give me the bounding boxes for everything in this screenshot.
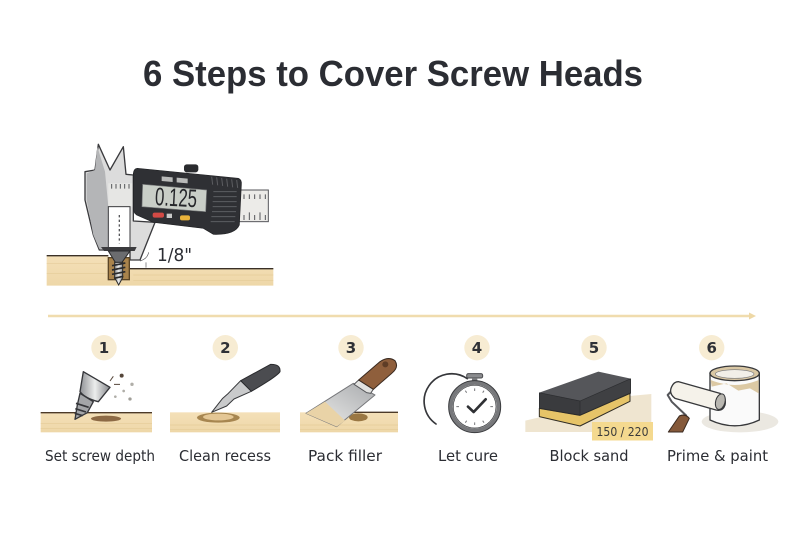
step 5 label: Block sand bbox=[550, 447, 628, 465]
angle mark bbox=[140, 252, 149, 268]
icon: stopwatch with check bbox=[424, 374, 501, 433]
step 3 number: 3 bbox=[346, 339, 356, 357]
depth label: 1/8" bbox=[157, 245, 192, 266]
step 1 label: Set screw depth bbox=[45, 447, 155, 465]
hero illustration: caliper measuring screw depth bbox=[47, 144, 273, 286]
grit label: 150 / 220 bbox=[596, 425, 648, 439]
step 5 bbox=[525, 335, 653, 465]
icon: tool cleaning recess bbox=[170, 364, 280, 432]
step 5 number: 5 bbox=[589, 339, 599, 357]
icon: paint can and roller bbox=[668, 366, 778, 432]
screw in recess bbox=[101, 247, 137, 285]
caliper beam bbox=[108, 183, 268, 222]
step 1 number: 1 bbox=[99, 339, 109, 357]
digital display body: 0.125 bbox=[154, 183, 198, 213]
step 2 bbox=[170, 335, 280, 465]
step 4 bbox=[424, 335, 501, 465]
wood board bbox=[47, 256, 273, 286]
title: 6 Steps to Cover Screw Heads bbox=[143, 53, 643, 94]
digital display body bbox=[133, 164, 241, 234]
icon: putty knife with filler bbox=[300, 359, 398, 432]
icon: sanding block bbox=[525, 372, 651, 432]
step 2 label: Clean recess bbox=[179, 447, 271, 465]
step 6 number: 6 bbox=[706, 339, 717, 357]
timeline arrow bbox=[48, 312, 756, 320]
step 3 bbox=[300, 335, 398, 465]
step 2 number: 2 bbox=[220, 339, 231, 357]
caliper jaws bbox=[85, 144, 155, 260]
step 4 label: Let cure bbox=[438, 447, 498, 465]
step 6 bbox=[667, 335, 778, 465]
step 4 number: 4 bbox=[472, 339, 482, 357]
step 6 label: Prime & paint bbox=[667, 447, 768, 465]
icon: screw driving into wood bbox=[41, 372, 152, 432]
step 3 label: Pack filler bbox=[308, 447, 383, 465]
step 1 bbox=[41, 335, 155, 465]
